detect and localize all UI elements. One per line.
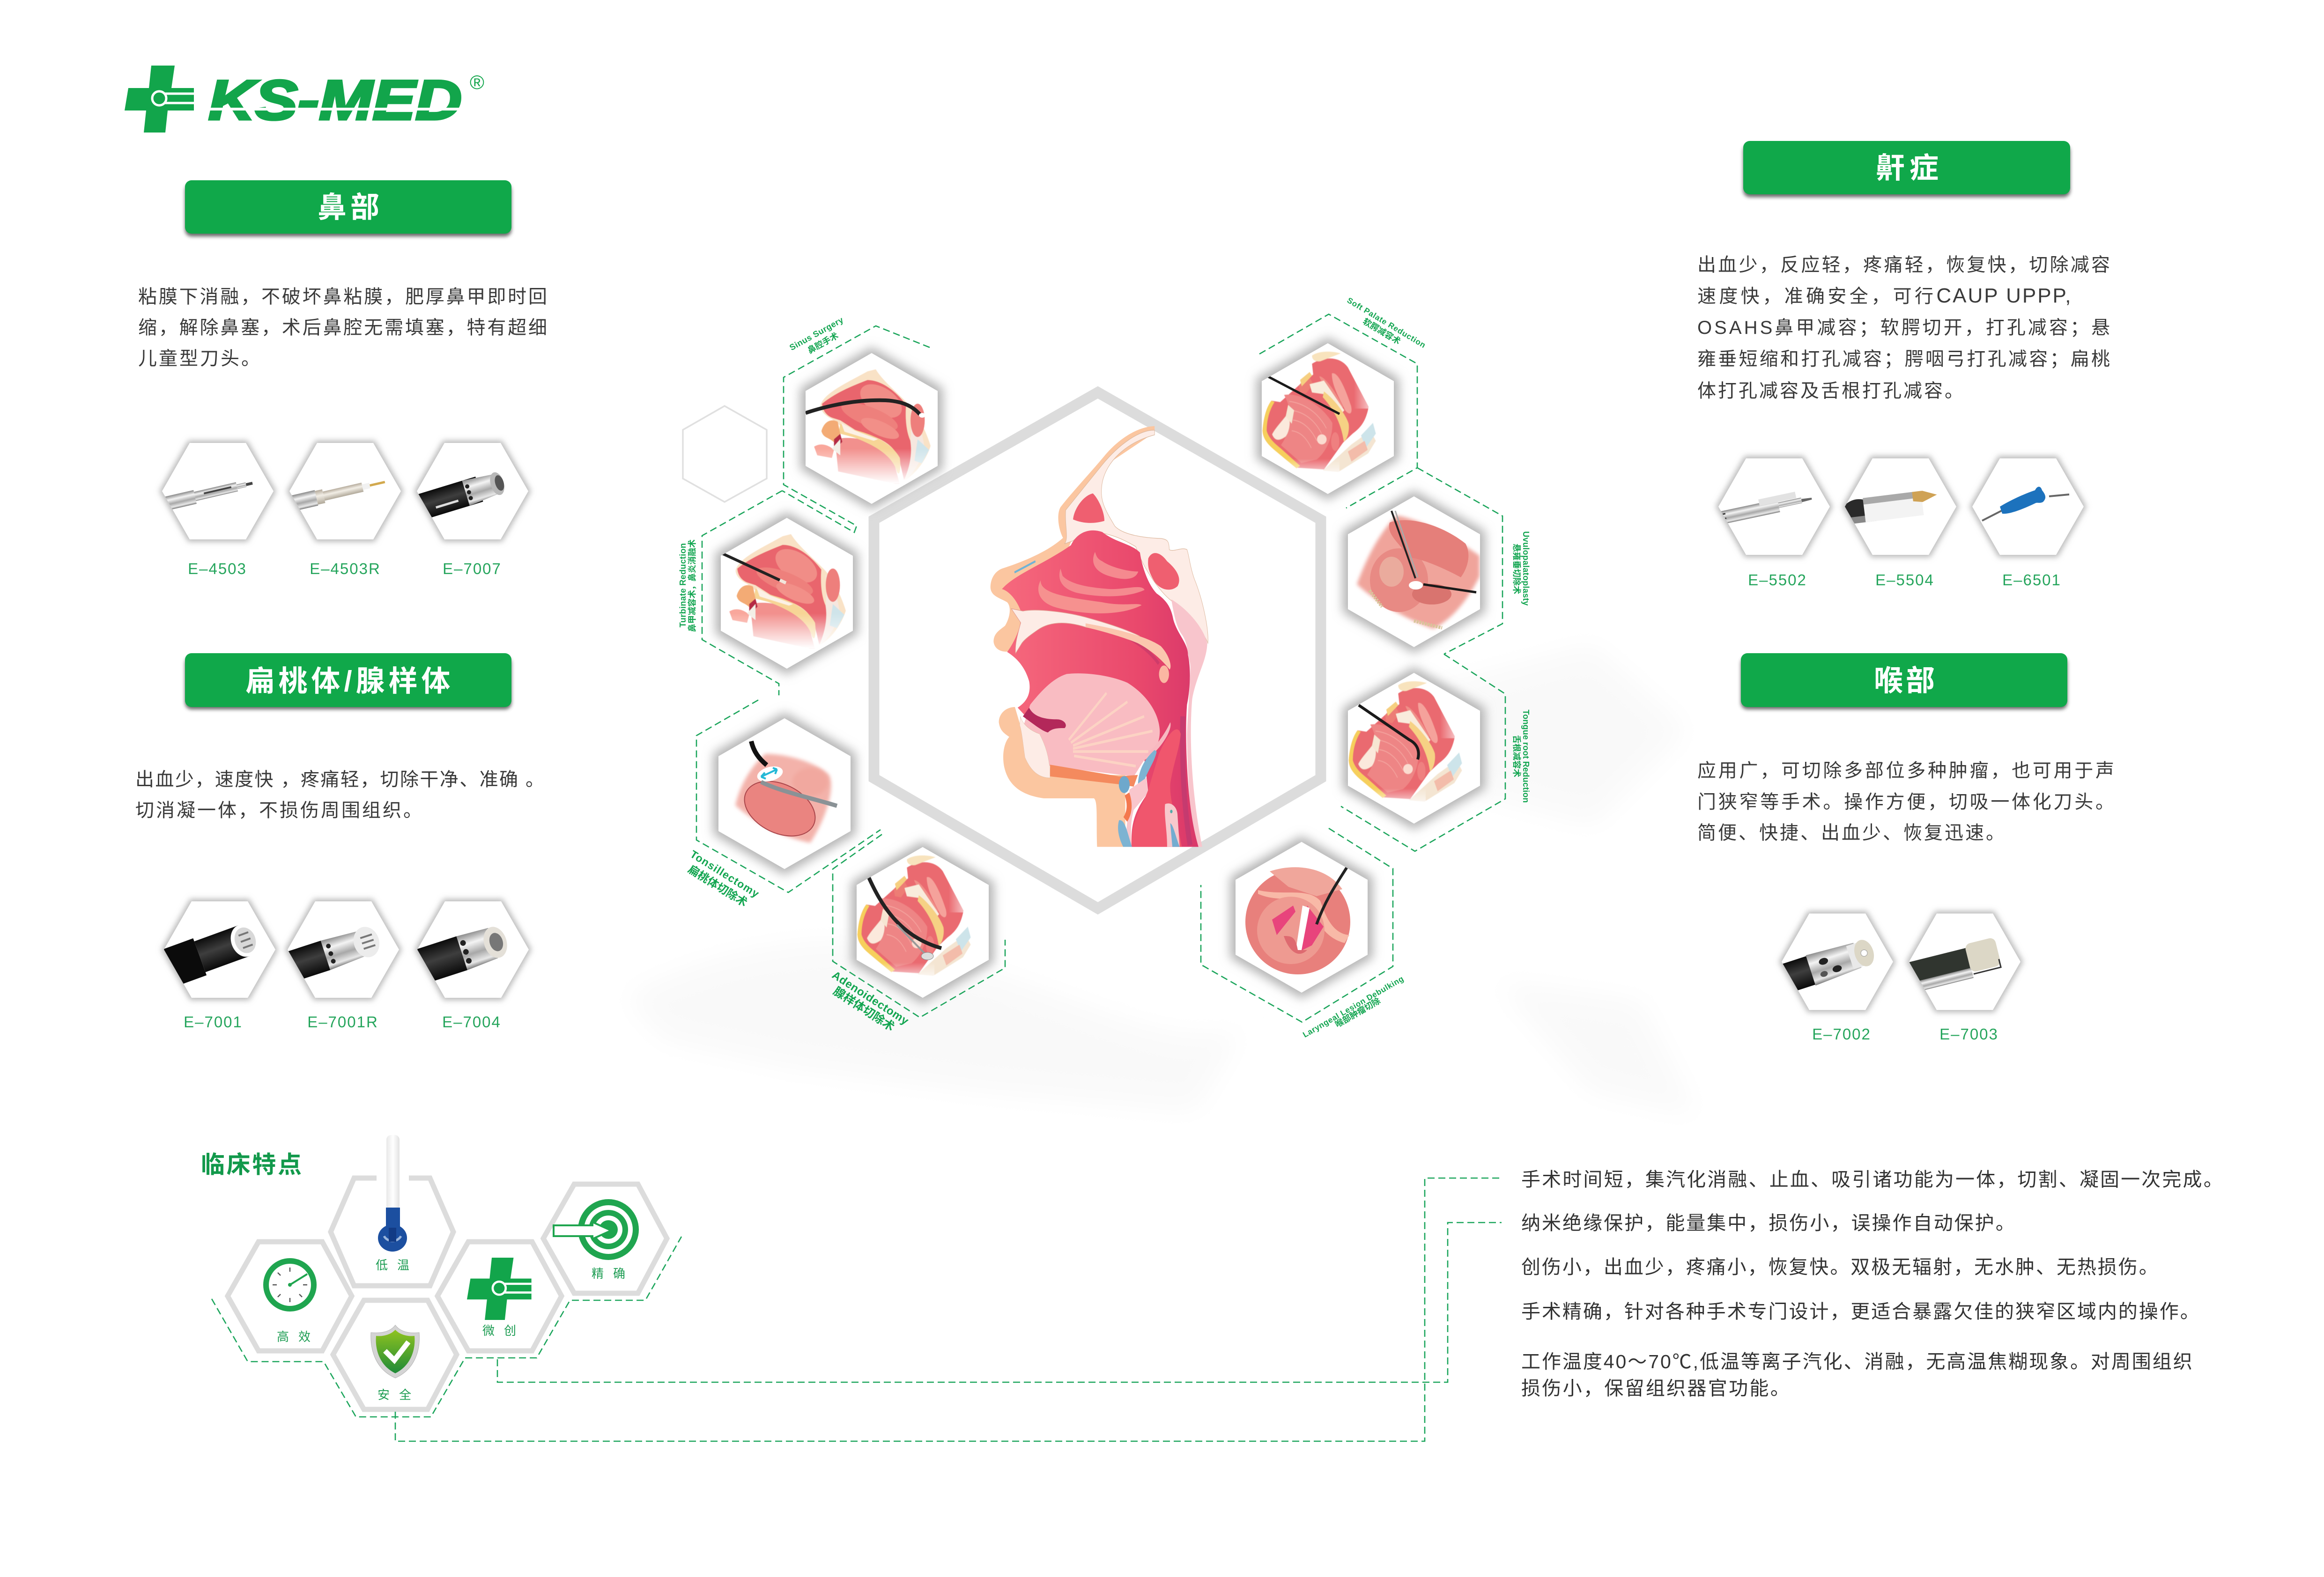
text: larynx description	[1697, 760, 2116, 843]
illustration: head sagittal anatomy	[991, 426, 1208, 847]
heading: nose: 鼻部	[318, 192, 379, 224]
feature: safe	[333, 1300, 457, 1409]
dashed outline	[1259, 314, 1417, 508]
panel: tonsillectomy	[686, 700, 881, 909]
panel: soft palate reduction	[1259, 296, 1427, 508]
text: snoring description: 出血少，反应轻，疼痛轻，恢复快，切除减容	[1697, 255, 2112, 275]
heading: nose	[185, 180, 511, 236]
label: Tonsillectomy: Tonsillectomy	[688, 848, 762, 900]
text: nose description: 缩，解除鼻塞，术后鼻腔无需填塞，特有超细	[138, 317, 549, 338]
product: E-5502	[1715, 458, 1830, 555]
text: snoring description: 雍垂短缩和打孔减容；腭咽弓打孔减容；扁桃	[1697, 349, 2112, 369]
text: tonsil description: 切消凝一体，不损伤周围组织。	[135, 800, 424, 821]
dashed outline	[833, 834, 1005, 1017]
icon: target	[554, 1199, 639, 1260]
label: 低温	[376, 1258, 419, 1272]
panel: clinical features	[201, 1135, 681, 1417]
icon: shield	[371, 1325, 419, 1378]
heading: tonsil and adenoid	[185, 653, 511, 709]
label: Sinus Surgery: Sinus Surgery	[788, 315, 845, 353]
connector: minimally invasive to text	[497, 1223, 1502, 1382]
text: larynx description: 门狭窄等手术。操作方便，切吸一体化刀头。	[1697, 792, 2116, 812]
dashed outline	[702, 491, 782, 695]
feature: efficient	[228, 1242, 352, 1351]
background: faint world map	[628, 646, 1695, 1114]
logo wordmark: KS-MED	[208, 69, 462, 132]
dashed outline	[696, 700, 881, 892]
text block: clinical feature descriptions: 工作温度40～70℃,低温等离子汽化、消融，无高温焦糊现象。对周围组织	[1521, 1351, 2193, 1372]
product: E-7007	[410, 443, 528, 539]
picture hexagon	[803, 353, 949, 510]
text: snoring description	[1697, 255, 2112, 401]
icon: green cross	[125, 66, 194, 133]
text block: clinical feature descriptions: 损伤小，保留组织器官功能。	[1521, 1378, 1791, 1399]
label: E-7001R: E–7001R	[307, 1013, 378, 1031]
product: E-7003	[1904, 914, 2021, 1010]
text: nose description: 儿童型刀头。	[138, 348, 262, 369]
label: Soft Palate Reduction: 软腭减容术	[1361, 316, 1402, 346]
label: Uvulopalatoplasty	[1512, 531, 1531, 606]
label: E-7002: E–7002	[1812, 1025, 1871, 1043]
connector: safe to text	[395, 1178, 1502, 1441]
label: Laryngeal Lesion Debulking: Laryngeal Lesion Debulking	[1301, 974, 1405, 1039]
heading: tonsil and adenoid: 扁桃体/腺样体	[245, 665, 451, 698]
heading: snoring	[1743, 141, 2070, 197]
label: E-4503: E–4503	[188, 560, 247, 577]
text: larynx description: 简便、快捷、出血少、恢复迅速。	[1697, 823, 2006, 843]
panel: tonsil and adenoid	[135, 653, 546, 1031]
text: tonsil description	[135, 769, 546, 821]
heading: larynx	[1741, 653, 2067, 709]
label: E-7001: E–7001	[184, 1013, 243, 1031]
label: Uvulopalatoplasty: Uvulopalatoplasty	[1521, 531, 1531, 606]
decorative empty hexagon	[683, 406, 767, 502]
label: Soft Palate Reduction: Soft Palate Reduction	[1346, 296, 1427, 350]
panel: laryngeal lesion debulking	[1201, 828, 1405, 1039]
picture hexagon	[718, 518, 864, 675]
label: Tonsillectomy: 扁桃体切除术	[686, 863, 749, 909]
product: E-5504	[1841, 458, 1956, 555]
picture hexagon	[718, 718, 851, 869]
icon: clock	[266, 1261, 314, 1309]
label: Tongue root Reduction: Tongue root Reduction	[1521, 710, 1531, 803]
label: E-7004: E–7004	[442, 1013, 501, 1031]
product: E-7004	[412, 901, 529, 998]
label: 高效	[277, 1330, 320, 1344]
panel: snoring	[1697, 141, 2112, 589]
text block: clinical feature descriptions: 纳米绝缘保护，能量集中，损伤小，误操作自动保护。	[1521, 1212, 2016, 1234]
label: Laryngeal Lesion Debulking: 喉部肿瘤切除	[1333, 995, 1382, 1029]
dashed outline	[1341, 654, 1505, 851]
product: E-4503R	[286, 443, 401, 539]
label: 微创	[482, 1324, 525, 1338]
label: E-5502: E–5502	[1748, 571, 1807, 589]
heading: larynx: 喉部	[1874, 665, 1935, 697]
text: tonsil description: 出血少，速度快 ，疼痛轻，切除干净、准确 。	[135, 769, 546, 790]
text: snoring description: 体打孔减容及舌根打孔减容。	[1697, 381, 1965, 401]
product: E-6501	[1972, 458, 2084, 555]
icon: cross	[467, 1258, 532, 1320]
product: E-7001	[155, 901, 275, 998]
label: Adenoidectomy: 腺样体切除术	[831, 984, 897, 1034]
label: Uvulopalatoplasty: 悬雍垂切除术	[1512, 544, 1522, 594]
label: E-7003: E–7003	[1939, 1025, 1998, 1043]
product: E-7002	[1777, 914, 1893, 1010]
logo: KS-MED	[125, 66, 484, 133]
text block: clinical feature descriptions: 手术精确，针对各种手术专门设计，更适合暴露欠佳的狭窄区域内的操作。	[1521, 1301, 2200, 1322]
label: 安全	[377, 1388, 421, 1402]
text: larynx description: 应用广，可切除多部位多种肿瘤，也可用于声	[1697, 760, 2116, 781]
label: Adenoidectomy: Adenoidectomy	[829, 969, 911, 1028]
label: Tongue root Reduction	[1512, 710, 1531, 803]
product: E-7001R	[283, 901, 399, 998]
icon: thermometer	[378, 1135, 407, 1252]
text block: clinical feature descriptions: 手术时间短，集汽化消融、止血、吸引诸功能为一体，切割、凝固一次完成。	[1521, 1169, 2224, 1190]
picture hexagon	[856, 847, 989, 998]
label: 精确	[592, 1267, 635, 1281]
central hexagon frame	[874, 392, 1321, 908]
label: Sinus Surgery: 鼻腔手术	[806, 331, 840, 355]
dashed outline	[1201, 828, 1393, 1022]
label: E-7007: E–7007	[443, 560, 502, 577]
label: Tongue root Reduction: 舌根减容术	[1512, 735, 1522, 777]
picture hexagon	[1348, 496, 1480, 647]
panel: turbinate reduction	[678, 491, 864, 695]
text: nose description: 粘膜下消融，不破坏鼻粘膜，肥厚鼻甲即时回	[138, 287, 549, 307]
label: E-4503R: E–4503R	[310, 560, 381, 577]
panel: sinus surgery	[782, 315, 949, 532]
panel: larynx	[1697, 653, 2116, 1043]
text: snoring description: OSAHS鼻甲减容；软腭切开，打孔减容；悬	[1697, 317, 2112, 338]
label: Turbinate Reduction	[678, 539, 697, 632]
text block: clinical feature descriptions: 创伤小，出血少，疼痛小，恢复快。双极无辐射，无水肿、无热损伤。	[1521, 1256, 2159, 1278]
registered mark: ®	[470, 71, 484, 93]
label: E-5504: E–5504	[1875, 571, 1934, 589]
picture hexagon	[1347, 673, 1480, 824]
panel: nose	[138, 180, 549, 577]
dashed outline	[1417, 468, 1502, 654]
heading: snoring: 鼾症	[1876, 152, 1939, 184]
heading: clinical features: 临床特点	[201, 1151, 303, 1178]
label: E-6501: E–6501	[2002, 571, 2061, 589]
panel: uvulopalatoplasty	[1348, 468, 1531, 654]
picture hexagon	[1236, 842, 1368, 993]
feature: minimally invasive	[437, 1242, 562, 1351]
panel: tongue root reduction	[1341, 654, 1531, 851]
dashed outline: features	[212, 1237, 681, 1417]
label: Turbinate Reduction: 鼻甲减容术，鼻炎消融术	[687, 539, 697, 632]
text block: clinical feature descriptions	[1521, 1169, 2224, 1399]
text: nose description	[138, 287, 549, 369]
label: Turbinate Reduction: Turbinate Reduction	[678, 543, 688, 627]
picture hexagon	[1261, 343, 1394, 494]
dashed outline	[782, 326, 930, 532]
text: snoring description: 速度快，准确安全，可行CAUP UPPP,	[1697, 284, 2072, 307]
product: E-4503	[159, 443, 274, 539]
feature: low temperature	[331, 1135, 453, 1286]
panel: adenoidectomy	[829, 834, 1005, 1034]
feature: precise	[543, 1184, 667, 1293]
